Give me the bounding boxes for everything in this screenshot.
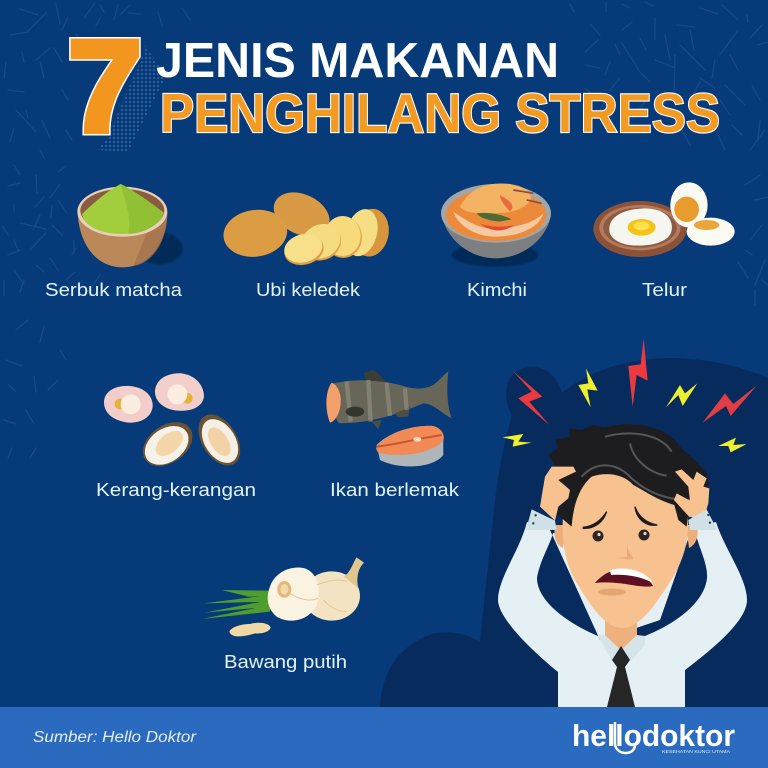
icon: yellow bolt — [578, 368, 598, 407]
mouth — [595, 569, 653, 596]
icon: eggs on plate — [593, 182, 735, 257]
numeral 7 fill: 7 — [68, 13, 142, 159]
label: Ikan berlemak — [330, 480, 460, 500]
source text: Sumber: Hello Doktor — [33, 729, 197, 746]
icon: red bolt top — [628, 338, 648, 407]
label: Serbuk matcha — [45, 280, 183, 300]
shirt and arms — [498, 522, 747, 707]
neck — [605, 615, 637, 655]
label: Ubi keledek — [256, 280, 361, 300]
title: number seven — [68, 13, 166, 159]
label: Kimchi — [467, 280, 527, 300]
icon: yellow bolt small right — [718, 438, 747, 452]
hair and eyebrows — [526, 424, 717, 530]
food item: serbuk matcha — [45, 184, 183, 300]
title: line two: PENGHILANG STRESS — [160, 82, 720, 144]
food item: telur — [593, 182, 735, 300]
food item: bawang putih — [202, 557, 364, 672]
food item: ikan berlemak — [326, 369, 460, 500]
stress lightning bolts — [503, 338, 757, 452]
food item: kerang-kerangan — [96, 373, 256, 500]
cuffs — [526, 509, 557, 530]
icon: kimchi bowl — [441, 183, 551, 267]
label: Bawang putih — [224, 652, 347, 672]
logo tagline: KESEHATAN KUNCI UTAMA — [662, 749, 730, 754]
halftone shadow of seven — [98, 44, 166, 152]
icon: yellow bolt small left — [503, 434, 532, 447]
icon: fish and salmon steak — [326, 369, 452, 466]
icon: red bolt right — [703, 386, 757, 423]
icon: yellow bolt right — [666, 383, 697, 407]
dark silhouette behind man — [380, 358, 768, 707]
food item: ubi keledek — [220, 184, 393, 300]
face — [563, 470, 688, 628]
hands — [540, 467, 576, 521]
label: Kerang-kerangan — [96, 480, 256, 500]
logo stethoscope tail — [615, 722, 635, 753]
icon: red bolt left — [513, 371, 549, 425]
icon: matcha bowl — [77, 184, 183, 267]
icon: garlic — [202, 557, 364, 636]
ears — [554, 525, 698, 548]
icon: potatoes — [220, 184, 393, 269]
nose — [615, 545, 633, 559]
icon: scallops and oysters — [104, 373, 249, 475]
collar — [598, 635, 645, 661]
tie — [607, 646, 635, 707]
title: line one: JENIS MAKANAN — [156, 34, 559, 88]
logo wordmark: hellodoktor — [572, 718, 735, 753]
eyes — [592, 530, 650, 542]
food item: kimchi — [441, 183, 551, 300]
label: Telur — [642, 280, 687, 300]
logo: hellodoktor — [572, 718, 735, 754]
numeral 7 outline: 7 — [68, 13, 142, 159]
footer band — [0, 707, 768, 768]
man with stress — [498, 424, 747, 707]
